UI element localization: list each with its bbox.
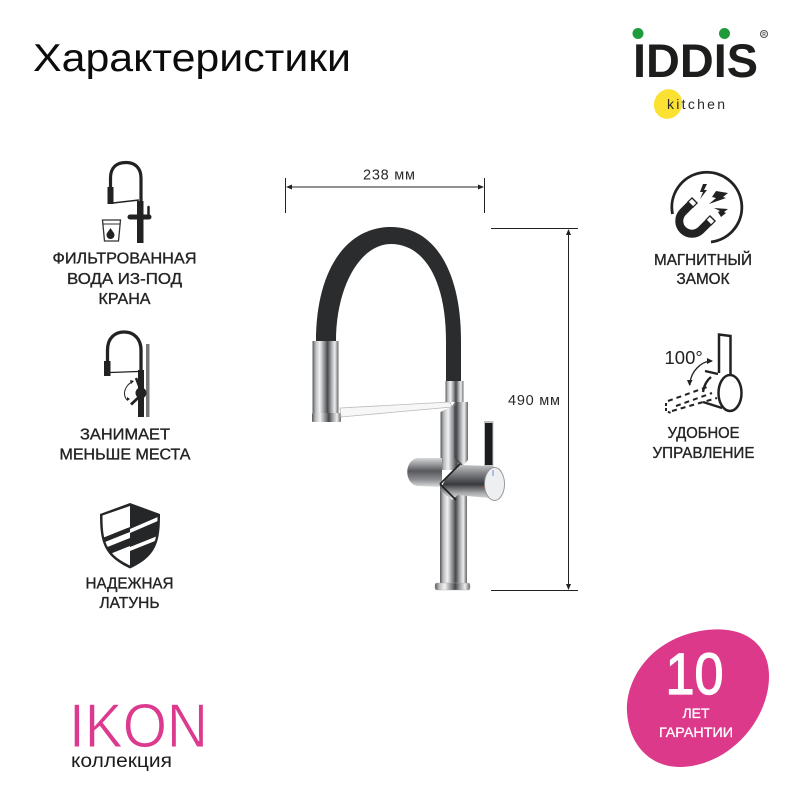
label: МАГНИТНЫЙ: [654, 251, 752, 269]
warranty badge: ЛЕТ: [682, 705, 710, 721]
collection name: IKON: [69, 692, 208, 761]
mixer body: [440, 465, 500, 500]
icon: faucet and glass: [102, 162, 149, 243]
spray head: [312, 341, 338, 413]
base flange: [435, 583, 470, 590]
collar: [446, 381, 464, 402]
label: НАДЕЖНАЯ: [86, 576, 174, 592]
dimension: height 490 mm: [491, 228, 578, 590]
lever handle: [484, 421, 494, 474]
feature: filtered water: КРАНА: [98, 291, 151, 308]
swivel arm: [340, 402, 452, 417]
faucet illustration: [312, 227, 504, 590]
warranty badge: ГАРАНТИИ: [659, 724, 733, 740]
warranty badge: 10: [666, 642, 724, 707]
mixer cap: [484, 468, 504, 500]
feature: magnetic lock: [654, 172, 752, 288]
dimension: width 238 mm: 238 мм: [363, 168, 415, 184]
logo: IDDIS kitchen: IDDIS: [633, 34, 758, 87]
title: Характеристики: [33, 37, 351, 80]
feature: magnetic lock: ЗАМОК: [676, 271, 730, 288]
logo: IDDIS kitchen: R: [762, 32, 766, 38]
feature: filtered water: [52, 162, 196, 308]
collection name: коллекция: [71, 751, 172, 772]
label: УДОБНОЕ: [668, 425, 740, 442]
feature: convenient control: УПРАВЛЕНИЕ: [652, 445, 754, 462]
logo: IDDIS kitchen: kitchen: [667, 96, 725, 112]
icon: lever rotation 100 degrees: 100°: [664, 347, 703, 368]
icon: swivel faucet by a wall: [104, 332, 150, 417]
black flexible hose: [316, 227, 461, 381]
feature: reliable brass: [86, 503, 174, 612]
icon: shield: [100, 503, 160, 572]
feature: convenient control: [652, 334, 754, 462]
feature: takes less space: [60, 332, 191, 464]
label: ЗАНИМАЕТ: [80, 426, 171, 444]
lower body: [440, 485, 467, 585]
label: ФИЛЬТРОВАННАЯ: [52, 250, 196, 268]
dimension: height 490 mm: 490 мм: [508, 393, 560, 409]
feature: takes less space: МЕНЬШЕ МЕСТА: [60, 446, 191, 464]
upper body: [440, 402, 468, 470]
feature: reliable brass: ЛАТУНЬ: [100, 595, 160, 612]
logo: IDDIS kitchen: [632, 28, 768, 124]
icon: magnet in ring: [672, 172, 742, 242]
dimension: width 238 mm: [286, 168, 484, 213]
left filter knob: [407, 458, 442, 487]
feature: filtered water: ВОДА ИЗ-ПОД: [67, 271, 183, 288]
warranty badge: [627, 629, 769, 767]
